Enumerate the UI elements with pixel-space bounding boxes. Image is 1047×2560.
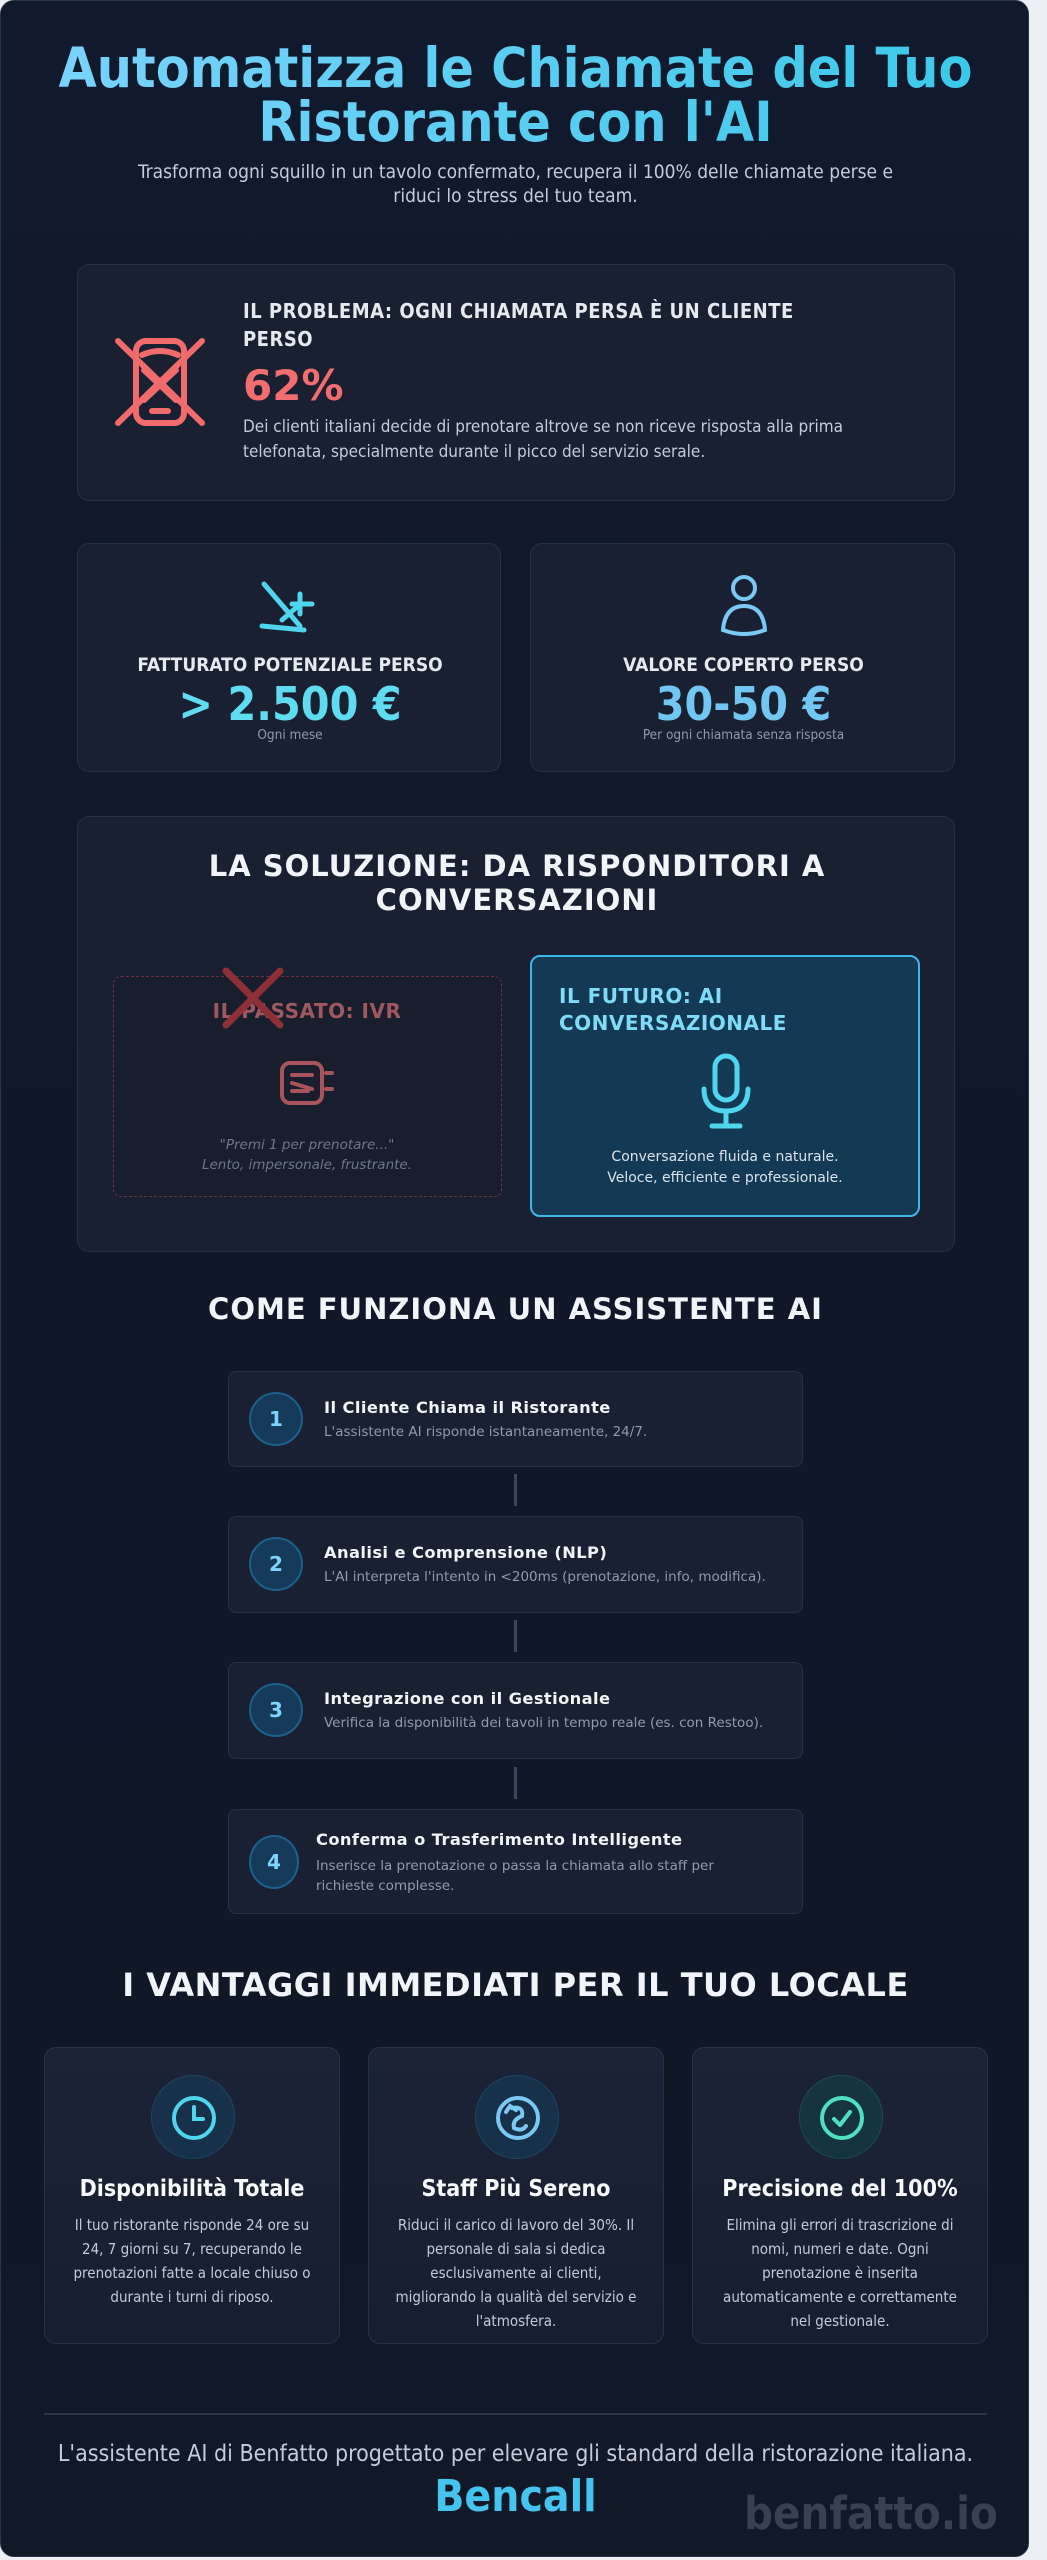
- heading: solution: LA SOLUZIONE: DA RISPONDITORI A: [209, 849, 825, 883]
- title: Automatizza le Chiamate del Tuo: [58, 36, 972, 100]
- step 2: L'AI interpreta l'intento in <200ms (prenotazione, info, modifica).: [324, 1569, 766, 1585]
- benefit: staff: Staff Più Sereno: [421, 2176, 611, 2202]
- panel: coperto: [530, 543, 955, 772]
- step 4: 4: [267, 1850, 281, 1874]
- heading: problem: IL PROBLEMA: OGNI CHIAMATA PERSA È UN CLIENTE PERSO: [243, 299, 794, 351]
- step 3: [228, 1662, 803, 1759]
- benefit: availability: Disponibilità Totale: [80, 2176, 304, 2202]
- benefit: staff: Riduci il carico di lavoro del 30%. Il personale di sala si dedica esclusivamente ai clienti, migliorando la qualità del servizio e l'atmosfera.: [396, 2216, 636, 2330]
- icon: refresh: [475, 2075, 559, 2159]
- text: future: [607, 1149, 843, 1186]
- benefit: staff: [368, 2047, 664, 2344]
- icon: clock: [151, 2075, 235, 2159]
- text: past: [202, 1137, 412, 1173]
- brand: Bencall: Bencall: [434, 2471, 597, 2522]
- icon: person: [720, 575, 768, 636]
- heading: solution: CONVERSAZIONI: [376, 883, 658, 917]
- heading future: IL FUTURO: AI: [559, 984, 723, 1008]
- panel: problem: [77, 264, 955, 501]
- step 2: [228, 1516, 803, 1613]
- value: 30-50 €: [656, 677, 831, 731]
- title: [1, 41, 1030, 149]
- icon: revenue down: [260, 582, 314, 632]
- step 3: Integrazione con il Gestionale: [324, 1689, 610, 1708]
- benefit: availability: Il tuo ristorante risponde 24 ore su 24, 7 giorni su 7, recuperando le prenotazioni fatte a locale chiuso o durante i turni di riposo.: [73, 2216, 310, 2306]
- step 2: Analisi e Comprensione (NLP): [324, 1543, 607, 1562]
- step 1: 1: [269, 1407, 283, 1431]
- subtitle: [138, 161, 893, 207]
- text: future: Veloce, efficiente e professionale.: [607, 1170, 843, 1186]
- subtitle: riduci lo stress del tuo team.: [393, 185, 638, 207]
- step 1: [228, 1371, 803, 1467]
- heading: solution: [209, 849, 825, 917]
- sub: Ogni mese: [257, 727, 323, 743]
- stat: 62%: 62%: [243, 361, 344, 410]
- step 2: 2: [269, 1552, 283, 1576]
- heading future: [559, 984, 787, 1035]
- heading: how it works: COME FUNZIONA UN ASSISTENTE AI: [208, 1292, 823, 1326]
- heading: benefits: I VANTAGGI IMMEDIATI PER IL TUO LOCALE: [122, 1966, 909, 2004]
- text: problem description: Dei clienti italiani decide di prenotare altrove se non riceve risposta alla prima telefonata, specialmente durante il picco del servizio serale.: [243, 417, 843, 462]
- benefit: precision: Precisione del 100%: [722, 2176, 958, 2202]
- step 1: L'assistente AI risponde istantaneamente, 24/7.: [324, 1424, 647, 1440]
- panel: solution: [77, 816, 955, 1252]
- benefit: availability: [44, 2047, 340, 2344]
- step 4: [228, 1809, 803, 1914]
- benefit: precision: [692, 2047, 988, 2344]
- panel: fatturato: [77, 543, 501, 772]
- step 3: Verifica la disponibilità dei tavoli in tempo reale (es. con Restoo).: [324, 1715, 763, 1731]
- footer text: L'assistente AI di Benfatto progettato per elevare gli standard della ristorazione italiana.: [58, 2441, 973, 2467]
- box: past IVR: [113, 976, 502, 1197]
- sub: Per ogni chiamata senza risposta: [643, 727, 844, 743]
- step 4: Conferma o Trasferimento Intelligente: [316, 1830, 682, 1849]
- subtitle: Trasforma ogni squillo in un tavolo confermato, recupera il 100% delle chiamate perse e: [138, 161, 893, 183]
- watermark: benfatto.io: [744, 2487, 998, 2540]
- text: future: Conversazione fluida e naturale.: [611, 1149, 839, 1165]
- value: > 2.500 €: [178, 677, 402, 731]
- text: past: Lento, impersonale, frustrante.: [202, 1157, 412, 1173]
- text: past: "Premi 1 per prenotare...": [220, 1137, 394, 1153]
- heading past: IL PASSATO: IVR: [213, 999, 401, 1023]
- title: Ristorante con l'AI: [258, 90, 773, 154]
- label: VALORE COPERTO PERSO: [623, 654, 864, 676]
- benefit: precision: Elimina gli errori di trascrizione di nomi, numeri e date. Ogni prenotazione è inserita automaticamente e correttamente nel gestionale.: [723, 2216, 957, 2330]
- label: FATTURATO POTENZIALE PERSO: [137, 654, 443, 676]
- icon: check: [799, 2075, 883, 2159]
- step 1: Il Cliente Chiama il Ristorante: [324, 1398, 611, 1417]
- step 4: Inserisce la prenotazione o passa la chiamata allo staff per richieste complesse.: [316, 1858, 714, 1894]
- step 3: 3: [269, 1698, 283, 1722]
- heading future: CONVERSAZIONALE: [559, 1011, 787, 1035]
- icon: IVR keypad: [280, 1061, 334, 1105]
- icon: crossed phone: [115, 338, 205, 426]
- icon: microphone: [702, 1054, 750, 1128]
- box: future AI: [530, 955, 920, 1217]
- icon: big X: [222, 968, 284, 1028]
